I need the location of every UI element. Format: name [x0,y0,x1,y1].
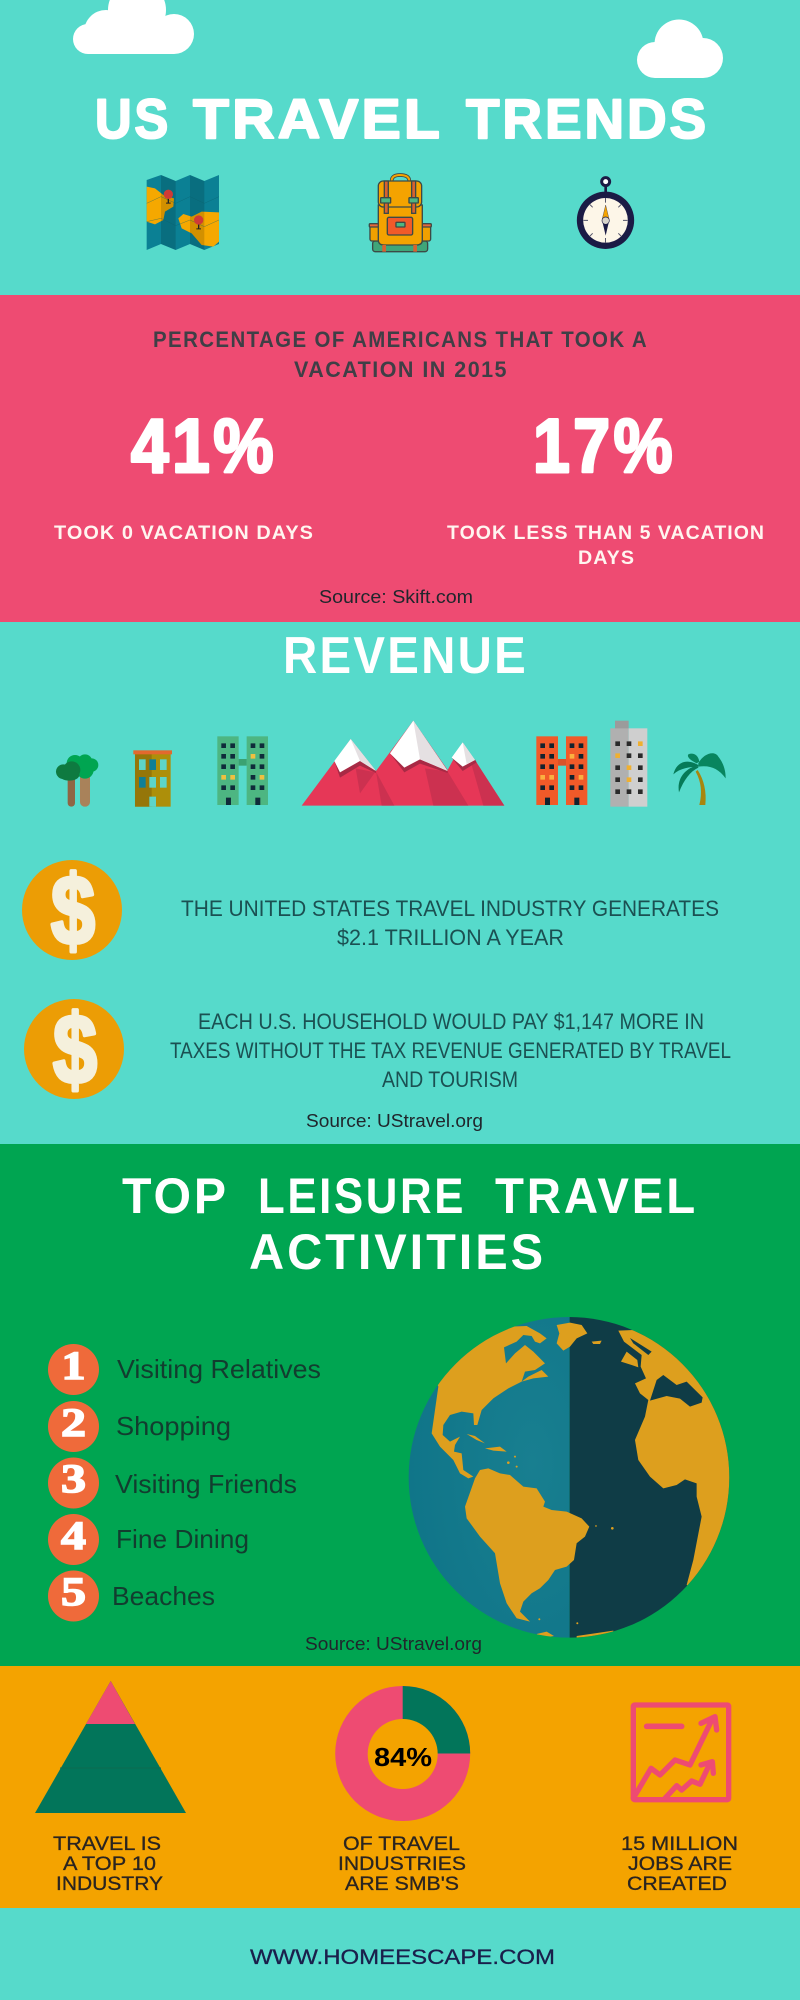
text: household taxes [170,1009,731,1092]
icon: dollar coin 2 [24,994,124,1104]
icon: mountains [302,721,504,806]
text: industry revenue [181,896,719,950]
list item 2: 2 [61,1400,86,1445]
panel: footer [0,1908,800,2000]
section heading: PERCENTAGE OF AMERICANS THAT TOOK A [153,327,648,352]
heading [122,1168,698,1280]
caption: jobs created: 15 MILLION [621,1834,738,1855]
website: WWW.HOMEESCAPE.COM [250,1946,555,1969]
list item 1 [48,1343,321,1395]
caption: jobs created [621,1834,738,1895]
caption: top 10 industry: INDUSTRY [56,1874,163,1895]
chart: donut: 84% [374,1742,432,1772]
text: household taxes: AND TOURISM [382,1067,518,1092]
caption: less than 5 days [447,523,765,569]
chart: pyramid [35,1681,186,1813]
caption: jobs created: JOBS ARE [628,1854,732,1875]
caption: jobs created: CREATED [627,1874,727,1895]
heading: ACTIVITIES [249,1224,546,1280]
list item 5: 5 [61,1569,86,1614]
icon: cloud right [637,20,723,78]
text: household taxes: EACH U.S. HOUSEHOLD WOULD PAY $1,147 MORE IN [198,1009,704,1034]
caption: took 0 days: TOOK 0 VACATION DAYS [54,523,314,544]
list item 1: 1 [62,1343,86,1388]
source: Source: Skift.com [319,587,473,607]
panel: leisure activities [0,1144,800,1666]
list item 2 [48,1400,231,1452]
text: industry revenue: $2.1 TRILLION A YEAR [337,925,564,950]
stat: 17 percent: 17% [533,404,676,489]
section heading [153,327,648,382]
list item 4: 4 [61,1513,86,1558]
stat: 41 percent: 41% [131,404,277,489]
caption: SMB share: ARE SMB'S [345,1874,459,1895]
title: US [95,87,171,150]
source: Source: UStravel.org [306,1111,483,1131]
list item 4: Fine Dining [116,1524,249,1554]
icon: cloud left [73,0,194,54]
list item 5 [48,1569,215,1622]
icon: globe [408,1317,730,1638]
list item 2: Shopping [116,1411,231,1441]
icon: growth chart [633,1705,729,1800]
icon: buildings and palm right [536,721,726,807]
chart: donut [335,1686,470,1821]
caption: top 10 industry: A TOP 10 [63,1854,156,1875]
icon: dollar coin 1: $ [51,855,95,965]
panel: vacation statistics [0,295,800,622]
list item 4 [48,1513,249,1565]
title: TRAVEL [193,87,443,150]
heading: REVENUE [283,627,528,685]
heading: LEISURE [258,1168,466,1224]
icon: map [147,175,219,250]
caption: SMB share: INDUSTRIES [338,1854,466,1875]
caption: less than 5 days: TOOK LESS THAN 5 VACATION [447,523,765,544]
text: industry revenue: THE UNITED STATES TRAVEL INDUSTRY GENERATES [181,896,719,921]
list item 1: Visiting Relatives [117,1354,321,1384]
caption: less than 5 days: DAYS [578,548,635,569]
source: Source: UStravel.org [305,1634,482,1654]
icon: compass [577,178,634,249]
list item 5: Beaches [112,1581,215,1611]
heading: TOP [122,1168,229,1224]
icon: dollar coin 1 [22,855,122,965]
icon: trees and buildings left [56,736,268,807]
caption: SMB share: OF TRAVEL [343,1834,460,1855]
icon: backpack [369,175,431,252]
section heading: VACATION IN 2015 [294,357,508,382]
list item 3 [48,1456,297,1508]
panel: header [0,0,800,295]
list item 3: 3 [61,1456,86,1501]
caption: top 10 industry: TRAVEL IS [53,1834,161,1855]
title: TRENDS [466,87,709,150]
panel: industry facts [0,1666,800,1908]
caption: SMB share [338,1834,466,1895]
icon: dollar coin 2: $ [53,994,97,1104]
title [95,87,709,150]
heading: TRAVEL [495,1168,698,1224]
list item 3: Visiting Friends [115,1469,297,1499]
panel: revenue [0,622,800,1144]
caption: top 10 industry [53,1834,163,1895]
